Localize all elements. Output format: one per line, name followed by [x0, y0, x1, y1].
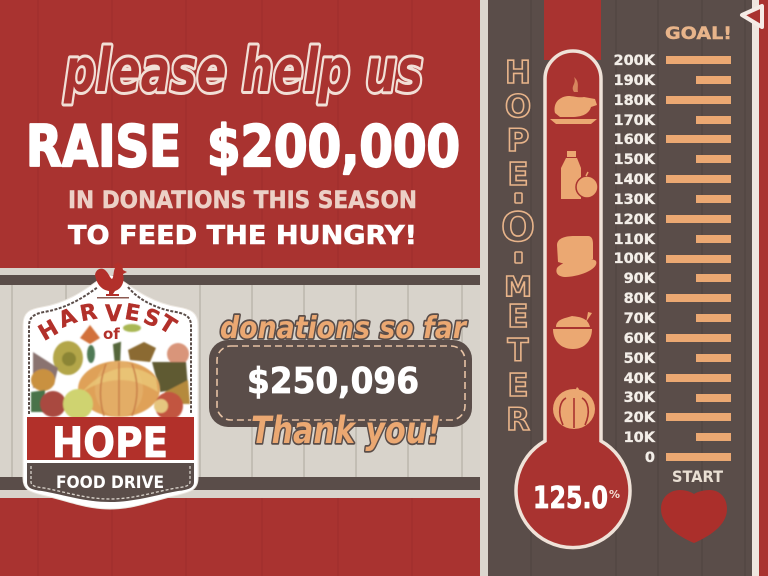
illustration: pumpkin and apples: [40, 343, 183, 420]
text: amount raised: $250,096: [247, 361, 419, 402]
text: to feed the hungry: TO FEED THE HUNGRY!: [68, 221, 417, 251]
text: in donations this season: IN DONATIONS THIS SEASON: [68, 186, 417, 214]
panel: left red barn background: [0, 0, 482, 576]
text: harvest: E: [123, 300, 142, 327]
heading: raise amount: $200,000: [207, 114, 460, 180]
text: harvest: [34, 300, 180, 346]
badge dashed border: [29, 287, 191, 414]
text: harvest: V: [105, 302, 122, 327]
scale labels: 140K: [613, 172, 656, 188]
vertical title: hope-o-meter: R: [506, 402, 530, 438]
scale labels: 80K: [624, 291, 656, 307]
badge: harvest of hope food drive: [23, 262, 198, 509]
scale labels: 200K: [613, 53, 656, 69]
vertical title: hope-o-meter: E: [507, 299, 529, 335]
scale labels: 10K: [624, 430, 656, 446]
scale labels: 20K: [624, 410, 656, 426]
scale tick bars: [666, 56, 731, 461]
text: harvest: A: [55, 304, 80, 333]
band: hope: HOPE: [52, 418, 168, 467]
vertical title: hope-o-meter: E: [507, 157, 529, 193]
badge outline: [23, 276, 198, 509]
scale labels: [613, 53, 656, 466]
band: food drive: [27, 463, 194, 502]
heading: raise amount: RAISE: [26, 114, 181, 180]
heading: raise amount: [26, 114, 460, 180]
vertical title: hope-o-meter: T: [507, 333, 529, 369]
illustration: harvest foliage: [31, 324, 190, 412]
scale labels: 160K: [613, 132, 656, 148]
heading: donations so far: donations so far: [220, 311, 468, 346]
text: harvest: S: [140, 304, 163, 333]
scale labels: 190K: [613, 73, 656, 89]
text: percent raised: 125.0: [533, 481, 608, 516]
icon: rooster weathervane: [95, 262, 129, 298]
scale labels: 150K: [613, 152, 656, 168]
scale labels: 130K: [613, 192, 656, 208]
panel: donation total box: [209, 340, 472, 427]
icon: bottle and apple: [561, 151, 598, 199]
band: food drive: FOOD DRIVE: [56, 473, 164, 493]
scale labels: 90K: [624, 271, 656, 287]
scale labels: 110K: [613, 232, 656, 248]
text: harvest: H: [34, 316, 63, 346]
scale labels: 170K: [613, 113, 656, 129]
vertical title: hope-o-meter: P: [507, 123, 529, 159]
text: of: of: [103, 325, 120, 343]
thermometer: [516, 0, 630, 548]
icon: bread: [556, 236, 596, 277]
scale labels: 60K: [624, 331, 656, 347]
vertical title: hope-o-meter: O: [505, 89, 531, 125]
panel: right dark thermometer board: [480, 0, 768, 576]
icon: roast chicken: [550, 77, 597, 124]
heading: please help us: please help us: [63, 36, 423, 106]
panel: wood plank band: [0, 268, 482, 498]
scale labels: 40K: [624, 371, 656, 387]
scale labels: 30K: [624, 390, 656, 406]
icon: pumpkin: [553, 387, 595, 429]
scale labels: 100K: [613, 251, 656, 267]
scale labels: 50K: [624, 351, 656, 367]
scale labels: 0: [645, 450, 655, 466]
text: harvest: R: [78, 300, 99, 327]
text: percent raised: %: [609, 488, 620, 501]
label: start: START: [672, 467, 723, 486]
vertical title: hope-o-meter: O: [501, 205, 535, 251]
label: goal: GOAL!: [665, 24, 732, 44]
scale labels: 120K: [613, 212, 656, 228]
text: thank you: Thank you!: [251, 409, 441, 452]
scale labels: 70K: [624, 311, 656, 327]
text: harvest: T: [154, 311, 180, 340]
vertical title: hope-o-meter: [501, 55, 535, 438]
scale labels: 180K: [613, 93, 656, 109]
vertical title: hope-o-meter: M: [504, 270, 532, 303]
vertical title: hope-o-meter: H: [505, 55, 531, 91]
icon: heart marker: [661, 490, 727, 543]
vertical title: hope-o-meter: E: [507, 368, 529, 404]
arrow: progress marker: [742, 6, 762, 27]
icon: bowl of food: [553, 312, 592, 349]
